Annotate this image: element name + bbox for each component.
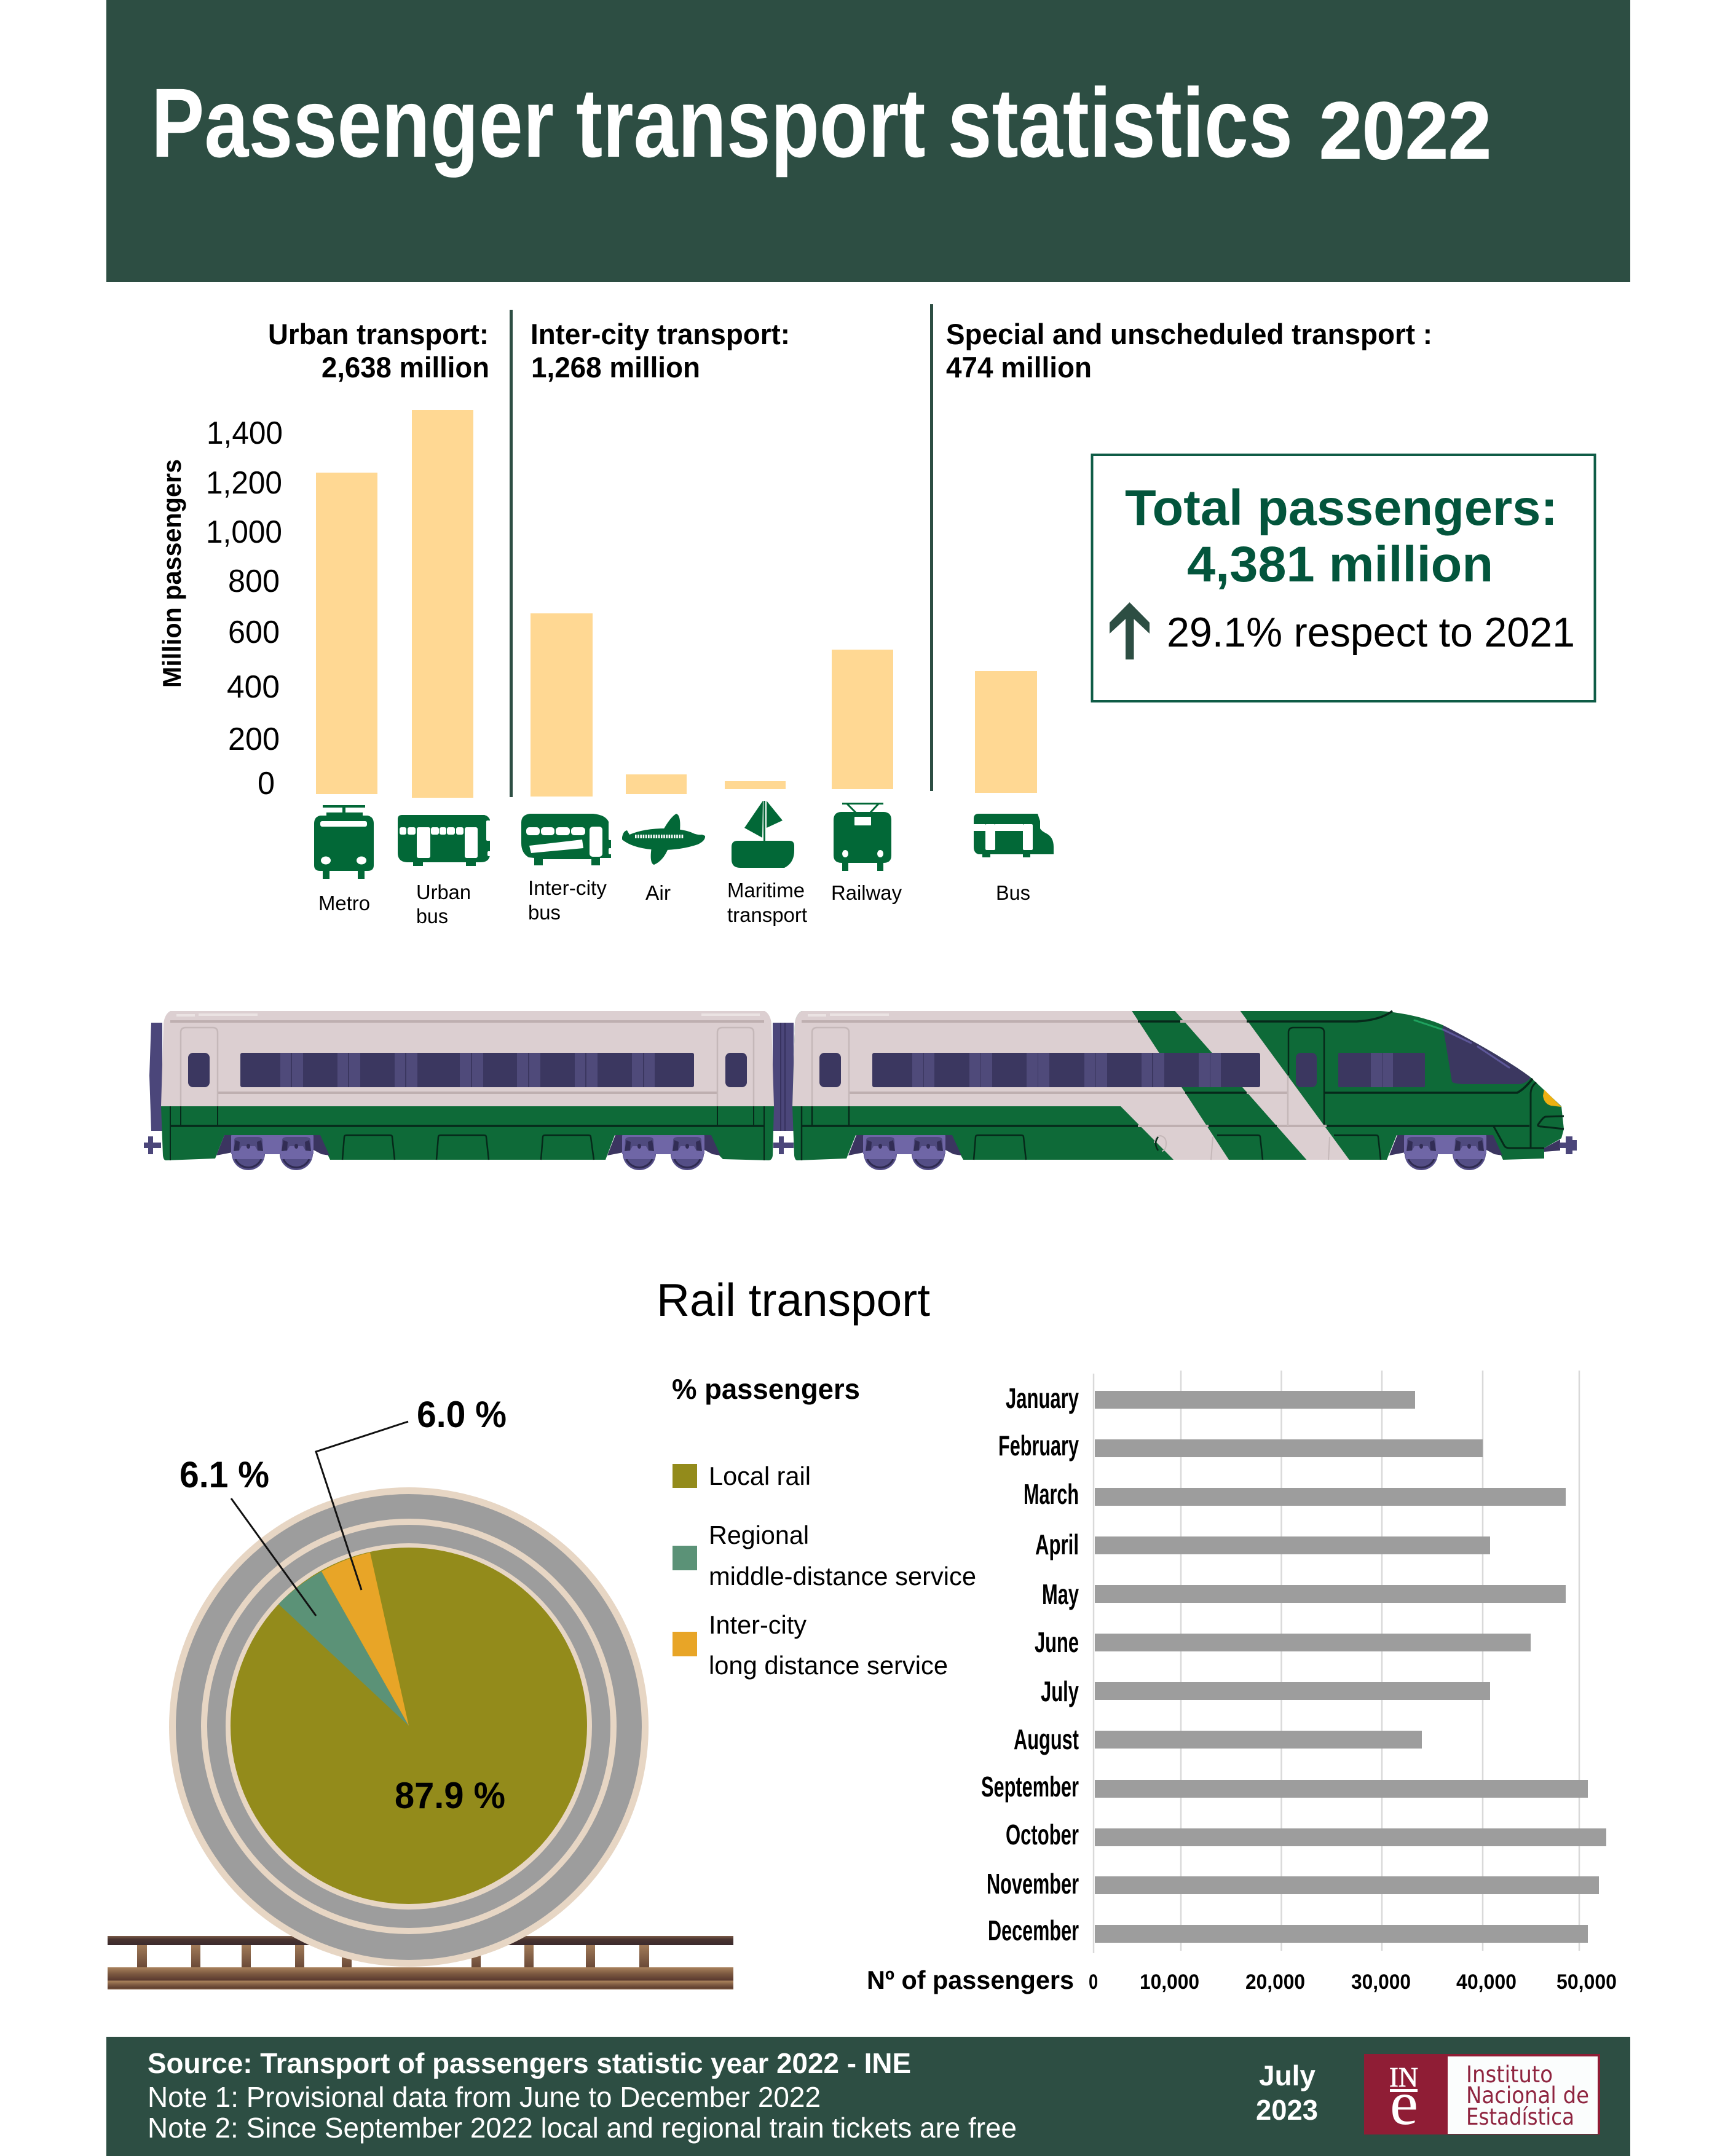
label: inter-city bus: Inter-city [528,876,607,899]
label: air: Air [645,881,671,904]
x axis ticks: 50,000 [1556,1970,1617,1994]
legend item: inter-city [673,1610,948,1680]
icon: up arrow [1110,602,1150,659]
label: inter-city bus: bus [528,901,561,924]
section headings: transport groups [268,318,1432,384]
logo: INE: Instituto [1466,2061,1553,2088]
legend title: % passengers [672,1373,860,1405]
legend item: regional: middle-distance service [709,1562,976,1591]
month labels: December [988,1914,1079,1946]
section headings: transport groups: Inter-city transport: [531,318,790,350]
legend item: inter-city: long distance service [709,1651,948,1680]
section headings: transport groups: Urban transport: [268,318,489,350]
x axis ticks: 40,000 [1456,1970,1517,1994]
x axis ticks: 30,000 [1351,1970,1411,1994]
callout headline: 4,381 million [1187,537,1493,592]
column dividers [510,304,933,797]
logo: INE [1364,2054,1600,2138]
logo: INE: e [1390,2069,1418,2138]
month labels: May [1042,1578,1079,1610]
y axis title: Million passengers [157,459,186,688]
x axis ticks [1089,1970,1617,1994]
train connectors [144,1023,794,1154]
label: railway: Railway [831,881,902,904]
date: July [1259,2060,1316,2091]
month labels: October [1006,1819,1079,1851]
icon: urban bus [398,815,491,866]
label: metro: Metro [318,892,370,915]
monthly bars [1095,1391,1606,1943]
gridlines [1094,1371,1579,1953]
pie slices [231,1548,587,1904]
month labels: March [1024,1478,1079,1510]
source and notes: Source: Transport of passengers statistic year 2022 - INE [148,2047,911,2079]
wheel rings [169,1487,649,1967]
y axis tick labels [206,415,283,801]
label: maritime transport: Maritime [727,879,805,902]
callout change text: 29.1% respect to 2021 [1167,609,1575,656]
logo: INE: Estadística [1466,2104,1574,2130]
title: Passenger transport statistics [151,68,1293,178]
illustration: train [144,1008,1577,1170]
label: bus: Bus [996,881,1030,904]
source and notes: Note 1: Provisional data from June to December 2022 [148,2081,821,2113]
legend item: regional [673,1521,976,1591]
icon: metro [314,805,374,879]
month labels: January [1006,1382,1079,1414]
section headings: transport groups: 1,268 million [531,351,700,384]
section headings: transport groups: 2,638 million [322,351,489,384]
month labels [981,1382,1079,1946]
pie values: 6.1 % [179,1454,269,1495]
rail lower bar [108,1967,733,1989]
y axis tick labels: 1,200 [206,465,282,501]
footer band [106,2037,1630,2156]
section headings: transport groups: Special and unscheduled transport : [946,318,1432,350]
pie values: 87.9 % [395,1775,505,1816]
y axis tick labels: 200 [228,722,280,757]
y axis tick labels: 400 [227,669,280,705]
leader lines [231,1422,408,1616]
label: inter-city bus [528,876,607,924]
car 2 and locomotive nose [790,1008,1577,1170]
icon: bus [974,814,1054,857]
label: maritime transport: transport [727,903,807,926]
heading: rail transport: Rail transport [657,1274,930,1326]
pie chart on train wheel and rail [108,1394,733,1989]
pie values: 6.0 % [417,1394,507,1435]
legend item: regional: Regional [709,1521,809,1549]
y axis tick labels: 800 [228,564,280,599]
y axis tick labels: 0 [258,766,275,801]
month labels: August [1014,1723,1079,1755]
month labels: September [981,1771,1079,1803]
bar chart: passengers by mode [316,410,1037,798]
callout headline [1125,480,1558,592]
pie values [179,1394,507,1816]
section headings: transport groups: 474 million [946,351,1092,384]
month labels: June [1035,1626,1079,1658]
rail upper bar and sleepers [108,1936,733,1967]
car 1 [161,1011,774,1170]
label: urban bus [416,881,471,927]
source and notes [148,2047,1017,2144]
logo: INE: Nacional de [1466,2082,1589,2109]
bar chart: monthly rail passengers [867,1371,1617,1994]
y axis tick labels: 1,000 [206,514,282,550]
icon: airplane [622,814,705,865]
month labels: February [998,1430,1079,1462]
legend item: inter-city: Inter-city [709,1610,807,1639]
title: 2022 [1319,85,1491,176]
x axis ticks: 0 [1089,1970,1098,1994]
callout headline: Total passengers: [1125,480,1558,536]
source and notes: Note 2: Since September 2022 local and regional train tickets are free [148,2112,1017,2144]
y axis tick labels: 600 [228,615,280,650]
logo: INE: IN [1389,2061,1418,2093]
icon: inter-city bus [521,814,612,865]
date: 2023 [1256,2094,1318,2126]
label: urban bus: bus [416,905,448,927]
callout: total passengers [1092,455,1595,701]
icon: sailboat [732,801,794,868]
x axis ticks: 10,000 [1140,1970,1199,1994]
month labels: April [1035,1528,1079,1560]
header banner [106,0,1630,282]
y axis tick labels: 1,400 [207,415,283,451]
month labels: November [987,1868,1079,1900]
month labels: July [1041,1675,1079,1707]
legend item: local rail: Local rail [709,1462,811,1490]
x axis title: Nº of passengers [867,1965,1074,1994]
x axis ticks: 20,000 [1245,1970,1305,1994]
icon: railway [834,803,891,871]
date [1256,2060,1318,2126]
legend [672,1373,976,1680]
label: maritime transport [727,879,807,926]
label: urban bus: Urban [416,881,471,903]
